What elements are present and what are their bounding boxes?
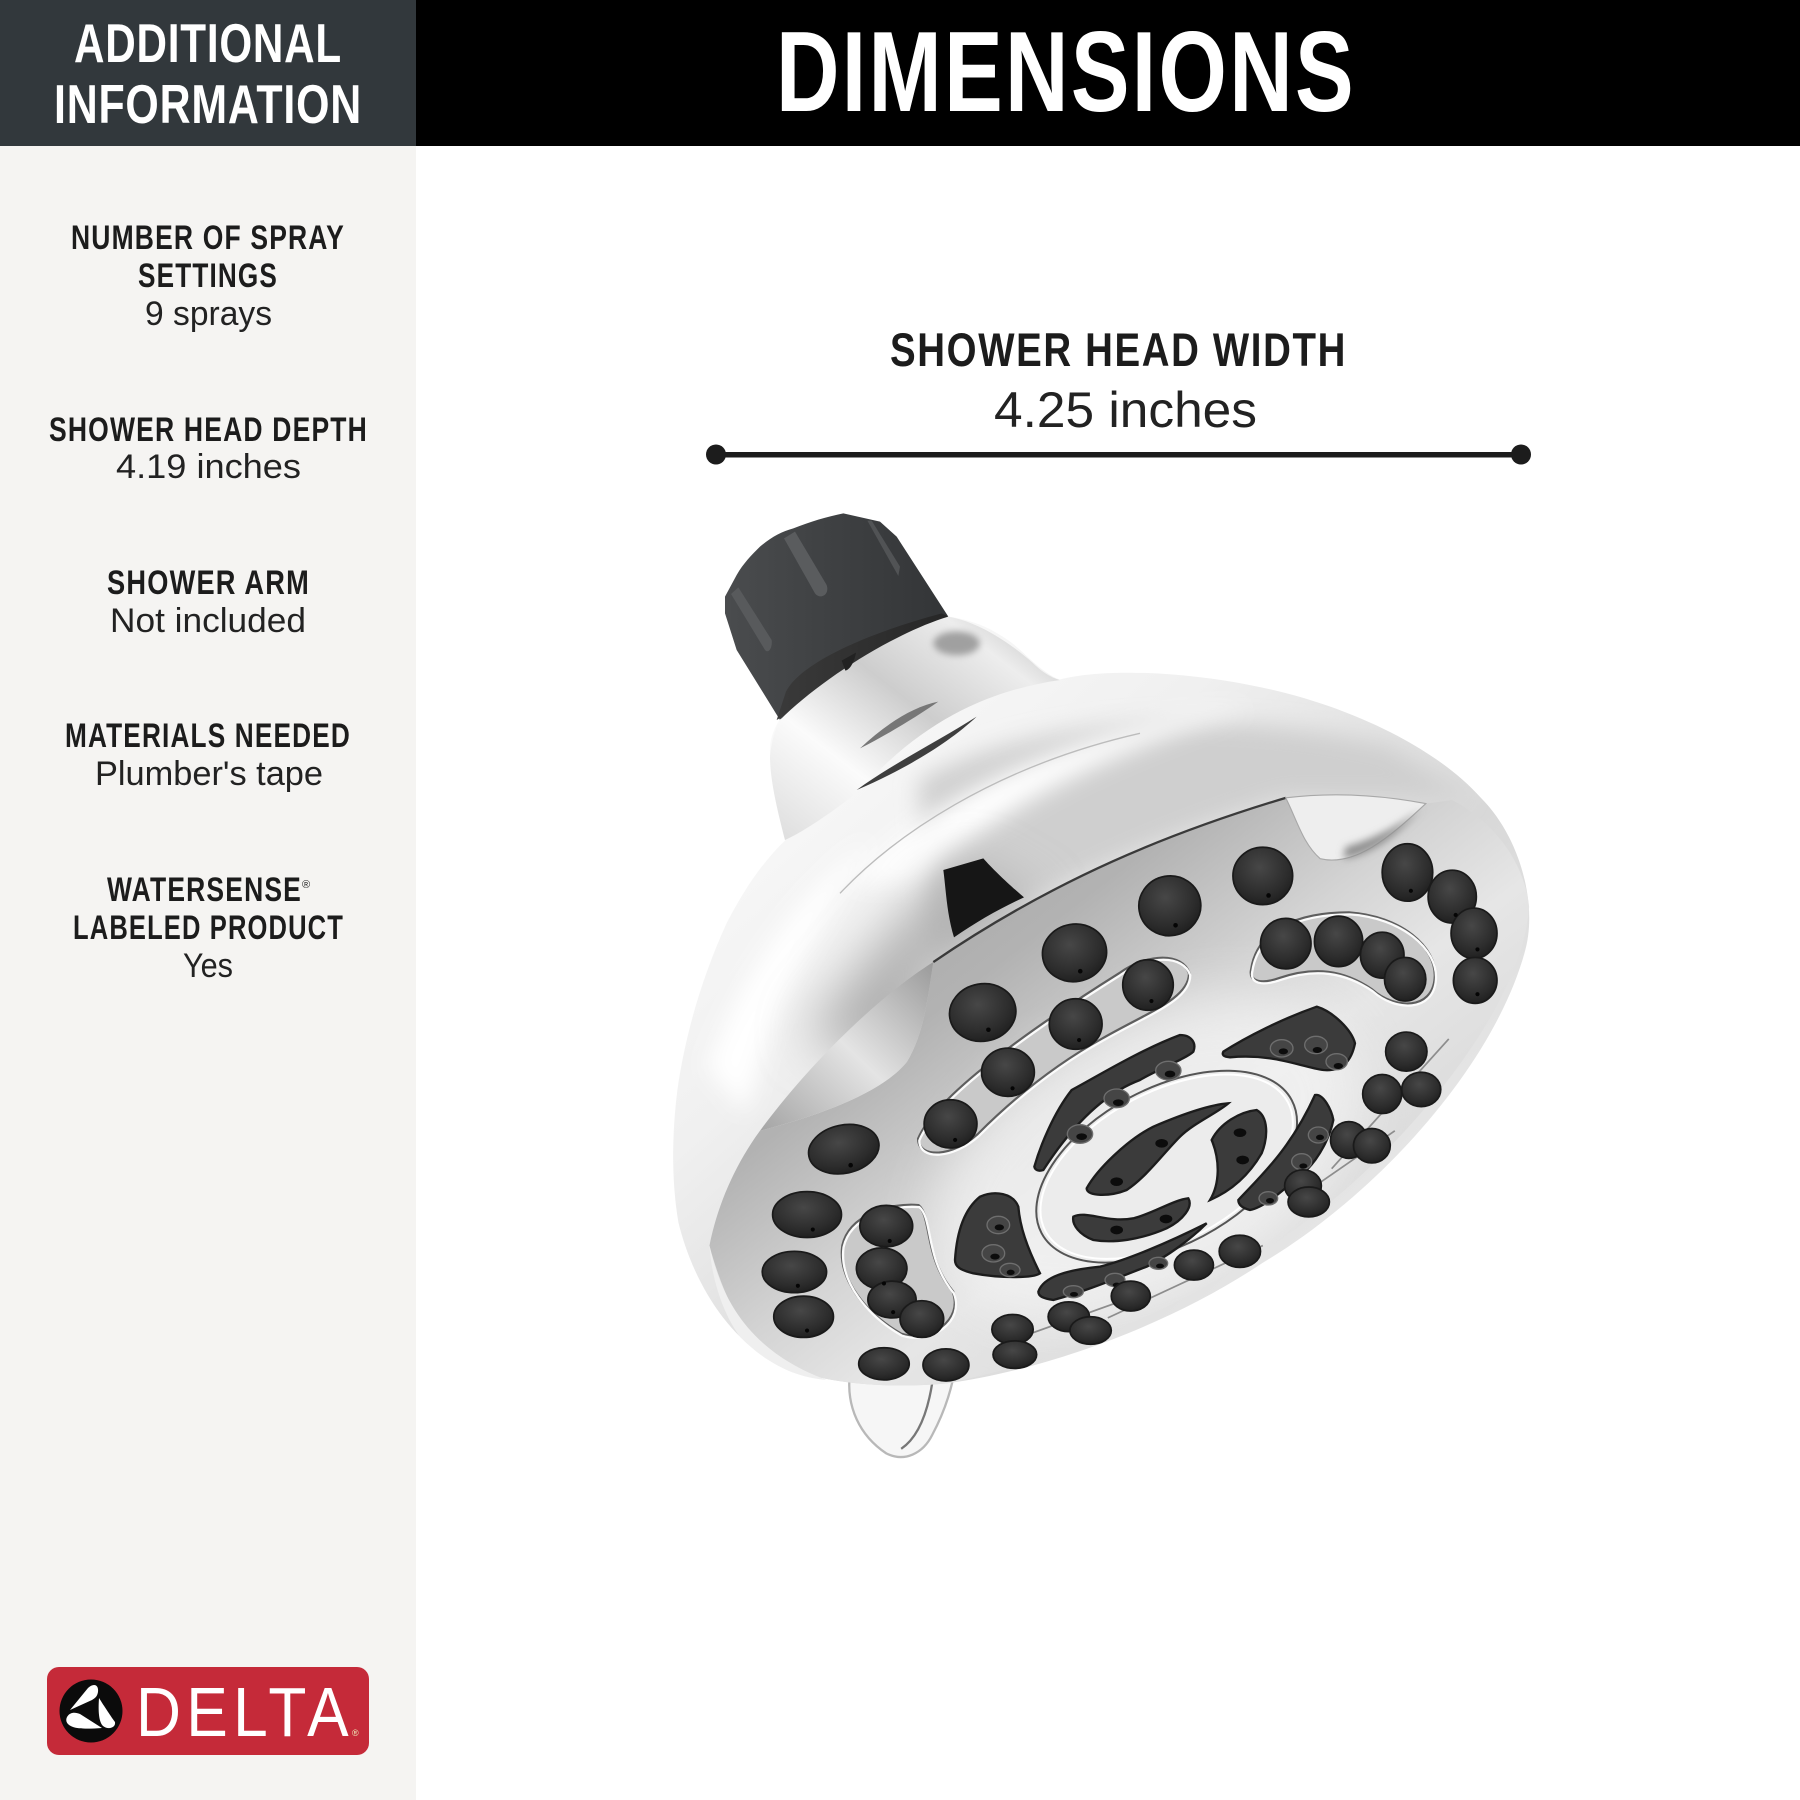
spec: number of spray settings	[71, 219, 345, 333]
header: additional information	[0, 0, 416, 146]
product: shower head	[673, 513, 1529, 1457]
lever tab	[849, 1378, 953, 1457]
panel: additional information sidebar	[0, 146, 416, 1800]
spec: shower head depth	[49, 411, 368, 486]
width label	[890, 323, 1347, 438]
spray face	[709, 795, 1529, 1389]
bright chrome glow around centre	[930, 989, 1354, 1316]
spec: shower arm: Not included	[110, 602, 306, 640]
black rubber nozzles	[762, 844, 1497, 1381]
centre ring and spray plates	[955, 1007, 1355, 1302]
neck chrome and reflections	[770, 617, 1140, 937]
spec: shower head depth: SHOWER HEAD DEPTH	[49, 411, 368, 449]
icon: Delta triangle mark	[60, 1680, 122, 1742]
logo: Delta: ®	[352, 1728, 359, 1738]
ring	[1005, 1031, 1329, 1302]
black swivel nut	[725, 513, 950, 720]
spec: number of spray settings: SETTINGS	[138, 257, 278, 295]
spec: materials needed: MATERIALS NEEDED	[65, 717, 351, 755]
chrome body	[673, 616, 1529, 1385]
spec: watersense labeled product	[73, 871, 344, 985]
spec: watersense labeled product: LABELED PRODUCT	[73, 909, 344, 947]
header: additional information: ADDITIONAL	[74, 12, 342, 74]
spec: watersense labeled product: WATERSENSE	[107, 871, 302, 909]
recessed channels	[842, 913, 1436, 1338]
dark plates	[955, 1007, 1355, 1300]
width label: 4.25 inches	[994, 382, 1257, 438]
spec: watersense labeled product: ®	[302, 879, 310, 891]
width label: SHOWER HEAD WIDTH	[890, 323, 1347, 376]
spec: number of spray settings: NUMBER OF SPRAY	[71, 219, 345, 257]
header: dimensions: DIMENSIONS	[776, 9, 1356, 136]
logo: Delta: DELTA	[136, 1673, 354, 1751]
width dimension line	[706, 444, 1531, 464]
nozzle jet holes	[796, 889, 1480, 1333]
header: dimensions	[416, 0, 1800, 146]
logo: Delta	[47, 1667, 369, 1755]
plate jets	[982, 1036, 1347, 1298]
spec: materials needed	[65, 717, 351, 793]
spec: shower head depth: 4.19 inches	[116, 448, 301, 486]
spec: shower arm: SHOWER ARM	[107, 564, 310, 602]
spec: shower arm	[107, 564, 310, 640]
spec: number of spray settings: 9 sprays	[145, 295, 272, 333]
spec: watersense labeled product: Yes	[183, 947, 233, 985]
header: additional information: INFORMATION	[54, 73, 362, 135]
spec: materials needed: Plumber's tape	[95, 755, 323, 793]
